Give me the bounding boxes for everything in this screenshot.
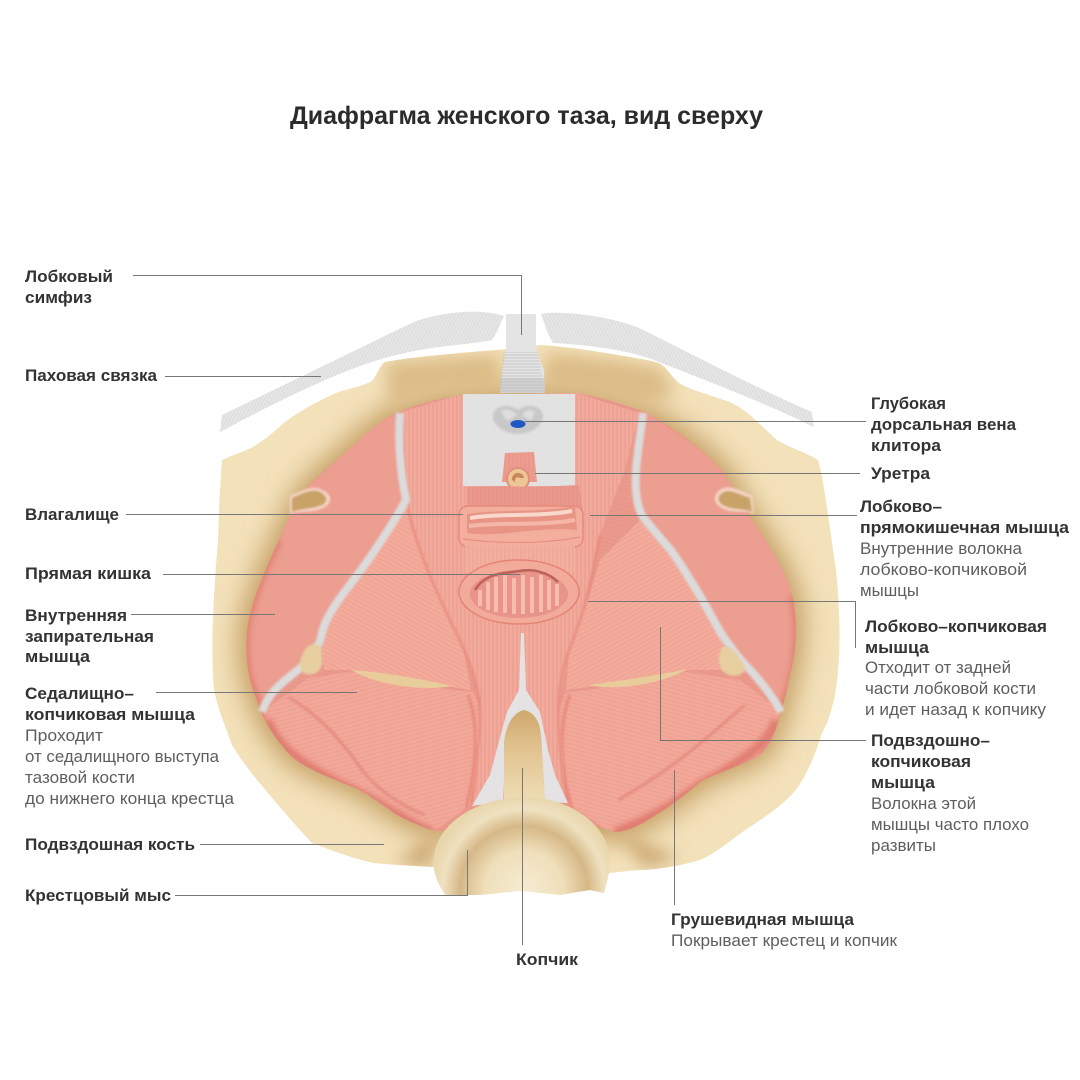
label: coccyx: Копчик <box>516 951 579 969</box>
label: puborectalis: мышцы <box>860 582 919 600</box>
label: pubic symphysis <box>25 268 113 307</box>
label: puborectalis <box>860 498 1070 600</box>
ischial spine, left <box>300 644 322 674</box>
label: ischiococcygeus: Проходит <box>25 727 103 745</box>
label: ischiococcygeus: от седалищного выступа <box>25 748 220 766</box>
label: iliococcygeus <box>871 732 1029 855</box>
sacrum <box>433 797 610 895</box>
leader lines <box>126 276 866 945</box>
label: ischiococcygeus: до нижнего конца крестца <box>25 790 235 808</box>
fascia arc, left <box>262 413 406 712</box>
label: inguinal ligament: Паховая связка <box>25 367 158 385</box>
label: urethra: Уретра <box>871 465 931 483</box>
label: iliococcygeus: мышца <box>871 774 936 792</box>
label: pubic symphysis: Лобковый <box>25 268 113 286</box>
anococcygeal fascia <box>472 633 568 806</box>
vagina <box>459 485 583 547</box>
label: obturator internus: Внутренняя <box>25 607 127 625</box>
label: ischiococcygeus: Седалищно– <box>25 685 134 703</box>
label: pubococcygeus: части лобковой кости <box>865 680 1036 698</box>
dorsal vein of clitoris <box>493 406 543 434</box>
coccyx <box>504 710 545 800</box>
obturator canal, right <box>715 488 754 514</box>
iliococcygeus muscle, right <box>559 672 781 832</box>
label: pubococcygeus: и идет назад к копчику <box>865 701 1047 719</box>
label: puborectalis: Внутренние волокна <box>860 540 1023 558</box>
label: deep dorsal vein: Глубокая <box>871 395 946 413</box>
levator slit, left <box>351 670 452 688</box>
illustration: pelvic floor anatomy <box>200 312 860 895</box>
label: sacral promontory: Крестцовый мыс <box>25 887 171 905</box>
obturator internus muscle, right <box>636 413 797 703</box>
label: pubococcygeus: Лобково–копчиковая <box>865 618 1047 636</box>
ischial spine, right <box>719 646 746 676</box>
muscle dark rim <box>246 540 796 717</box>
fascia arc, right <box>636 413 781 712</box>
label: ischiococcygeus: копчиковая мышца <box>25 706 196 724</box>
label: puborectalis: прямокишечная мышца <box>860 519 1070 537</box>
label: puborectalis: Лобково– <box>860 498 942 516</box>
urethra <box>502 452 537 490</box>
label: deep dorsal vein <box>871 395 1017 455</box>
levator slit, right <box>588 669 688 687</box>
label: deep dorsal vein: клитора <box>871 437 942 455</box>
inguinal ligament, left <box>220 312 504 432</box>
label: piriformis: Покрывает крестец и копчик <box>671 932 898 950</box>
pubic symphysis <box>500 314 545 393</box>
label: piriformis: Грушевидная мышца <box>671 911 855 929</box>
obturator canal, left <box>290 488 330 514</box>
label: obturator internus: запирательная <box>25 628 154 646</box>
pelvic floor muscle base <box>240 390 810 840</box>
label: obturator internus <box>25 607 154 666</box>
obturator internus muscle, left <box>252 415 400 696</box>
rectum <box>459 546 579 624</box>
inguinal ligament, right <box>541 313 814 427</box>
label: pubococcygeus <box>865 618 1047 719</box>
label: pubic symphysis: симфиз <box>25 289 92 307</box>
label: vagina: Влагалище <box>25 506 119 524</box>
label: pubococcygeus: мышца <box>865 639 930 657</box>
label: rectum: Прямая кишка <box>25 565 152 583</box>
label: deep dorsal vein: дорсальная вена <box>871 416 1017 434</box>
label: ischiococcygeus: тазовой кости <box>25 769 135 787</box>
label: obturator internus: мышца <box>25 648 91 666</box>
pubococcygeus muscle, right <box>566 520 726 690</box>
label: ischiococcygeus <box>25 685 235 808</box>
title: Диафрагма женского таза, вид сверху <box>290 102 763 130</box>
iliococcygeus muscle, left <box>263 672 482 832</box>
label: ilium: Подвздошная кость <box>25 836 195 854</box>
label: iliococcygeus: Волокна этой <box>871 795 976 813</box>
label: puborectalis: лобково-копчиковой <box>860 561 1027 579</box>
label: piriformis <box>671 911 898 950</box>
pelvic bone ring <box>200 340 860 880</box>
label: pubococcygeus: Отходит от задней <box>865 659 1011 677</box>
label: iliococcygeus: мышцы часто плохо <box>871 816 1029 834</box>
label: iliococcygeus: развиты <box>871 837 936 855</box>
label: iliococcygeus: Подвздошно– <box>871 732 990 750</box>
puborectalis central muscle bands <box>402 393 639 803</box>
perineal membrane panel <box>463 394 575 486</box>
label: iliococcygeus: копчиковая <box>871 753 971 771</box>
pubococcygeus muscle, left <box>322 502 471 690</box>
